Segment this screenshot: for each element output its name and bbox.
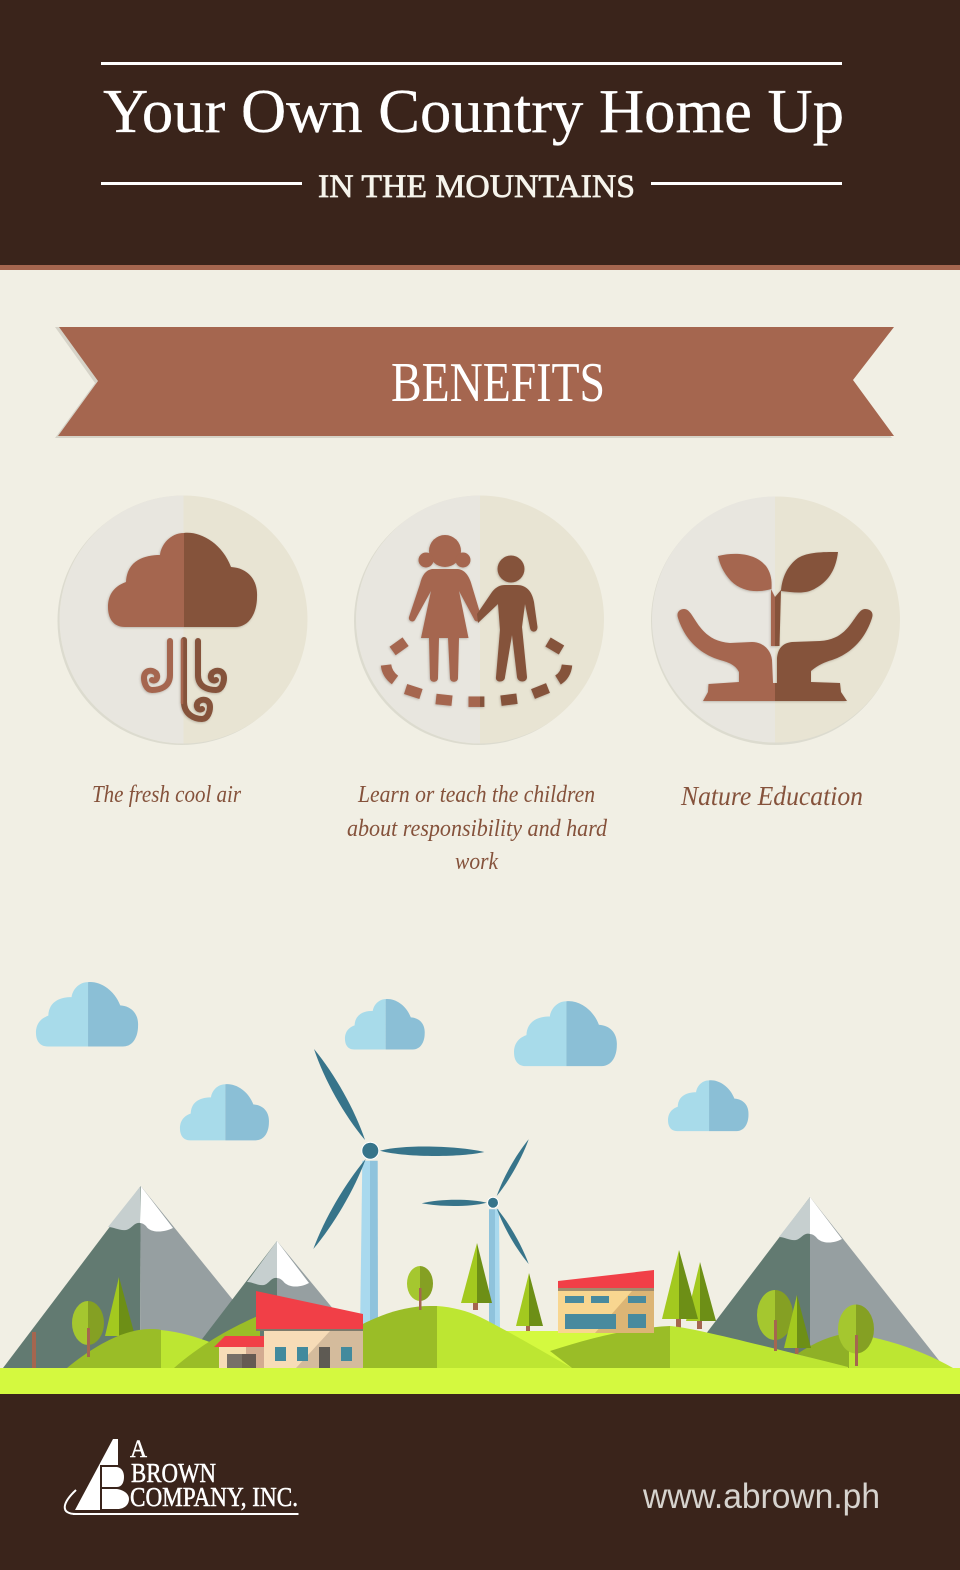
ground strip [0,1368,960,1394]
tree: back pine pair [662,1250,716,1329]
foreground trees and trunks [32,1266,874,1369]
tree: pine behind hill [461,1243,492,1310]
tree trunk left [87,1328,90,1357]
tree: round on middle hill [407,1266,433,1310]
website: www.abrown.ph [642,1477,880,1516]
tree: small pine [516,1273,543,1332]
logo: A Brown Company: BROWN [131,1458,216,1488]
fence post [32,1332,36,1369]
logo: A Brown Company [65,1436,299,1515]
mountains [3,1186,945,1368]
hills [67,1306,953,1368]
icon: girl and boy holding hands [386,535,567,702]
tree: pine right mountain [784,1295,811,1354]
tree: back pine left [105,1277,135,1343]
caption: nature education: Nature Education [680,781,863,811]
house: right building [558,1270,654,1333]
mountain: left large [3,1186,288,1368]
footer band [0,1394,960,1570]
clouds [36,982,749,1140]
wind turbine: small [422,1139,529,1330]
benefits ribbon [55,327,894,438]
caption: fresh air: The fresh cool air [92,782,242,808]
benefit circle: fresh air [58,496,308,745]
logo: A Brown Company: A [130,1436,147,1463]
title: Your Own Country Home Up [103,78,844,146]
tree: round right mountain [757,1290,793,1351]
background trees [72,1243,716,1345]
tree: round left [72,1301,104,1345]
tree: round far right [838,1304,874,1366]
icon: cloud with wind [108,533,257,719]
dashed ring [386,642,567,702]
subtitle: IN THE MOUNTAINS [318,169,635,205]
house: small annex [214,1336,264,1368]
mountain: right [680,1197,945,1368]
caption: children: Learn or teach the children [357,782,595,808]
caption: children [347,782,608,875]
benefit circle: nature education [651,496,900,745]
header band [0,0,960,270]
ribbon heading: BENEFITS [391,352,605,414]
icon: hands holding seedling [677,552,873,701]
caption: children: about responsibility and hard [347,816,608,842]
caption: children: work [455,849,498,875]
logo: A Brown Company: COMPANY, INC. [130,1482,298,1512]
wind turbine: large [313,1049,484,1335]
house: large red roof [256,1291,363,1368]
mountain: small middle [180,1241,382,1368]
benefit circle: children [354,496,604,745]
